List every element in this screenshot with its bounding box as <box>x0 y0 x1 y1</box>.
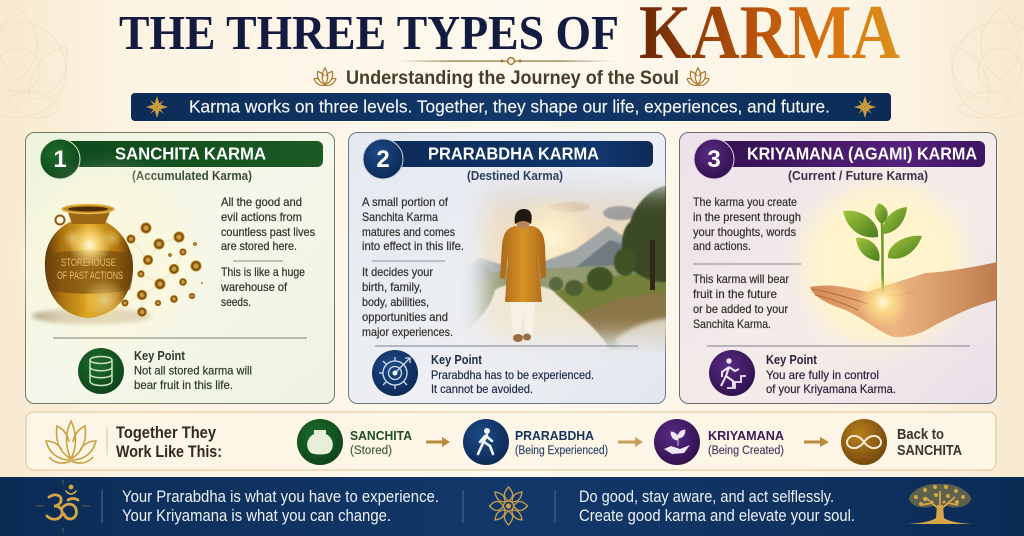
key point: Key Point <box>431 352 483 367</box>
description text: matures and comes <box>362 225 455 239</box>
flow heading: Together They <box>116 424 217 442</box>
icon: mandala <box>490 487 528 525</box>
description text: Sanchita Karma <box>362 210 438 224</box>
description text: into effect in this life. <box>362 239 464 253</box>
key point: It cannot be avoided. <box>431 382 533 396</box>
key point: Prarabdha has to be experienced. <box>431 368 594 382</box>
step: back to Sanchita <box>841 419 962 465</box>
description text <box>362 195 464 339</box>
step: Prarabdha: PRARABDHA <box>515 428 595 443</box>
icon: lotus <box>46 421 96 463</box>
icon: climbing stairs <box>709 350 755 396</box>
subtitle: (Accumulated Karma) <box>132 168 252 183</box>
description text: birth, family, <box>362 280 422 294</box>
description text: countless past lives <box>221 225 315 239</box>
pot label: OF PAST ACTIONS <box>57 270 123 282</box>
panel: Prarabdha Karma <box>348 132 680 404</box>
description text: It decides your <box>362 265 433 279</box>
pot label <box>57 257 123 282</box>
description text: your thoughts, words <box>693 225 796 239</box>
header bar: 1 <box>53 146 67 173</box>
header bar: 2 <box>376 146 390 173</box>
subtitle: Understanding the Journey of the Soul <box>346 68 679 89</box>
description text: warehouse of <box>220 280 288 294</box>
illustration: golden pot with seeds <box>25 175 203 345</box>
description text: fruit in the future <box>693 287 777 301</box>
illustration: man walking toward sunrise <box>468 172 666 354</box>
arrow <box>426 437 450 447</box>
description text: are stored here. <box>221 239 297 253</box>
intro banner <box>131 93 891 121</box>
footer text right <box>579 488 855 525</box>
step: Sanchita: SANCHITA <box>350 428 413 443</box>
header bar <box>694 139 985 179</box>
header bar: 3 <box>707 146 721 173</box>
panel: Kriyamana Karma <box>680 132 997 404</box>
panel: together they work like this <box>26 412 996 470</box>
pot label: STOREHOUSE <box>61 257 116 269</box>
intro banner: Karma works on three levels. Together, they shape our life, experiences, and future. <box>189 96 830 116</box>
description text: and actions. <box>693 239 751 253</box>
step: Kriyamana: KRIYAMANA <box>708 428 785 443</box>
title <box>119 0 900 75</box>
key point: Key Point <box>766 352 818 367</box>
description text: All the good and <box>221 195 302 209</box>
title ornament <box>398 58 614 64</box>
flow heading <box>116 424 222 461</box>
step: Kriyamana <box>654 419 785 465</box>
description text: major experiences. <box>362 325 453 339</box>
icon: tree of life <box>908 484 972 524</box>
description text: A small portion of <box>362 195 449 209</box>
key point: of your Kriyamana Karma. <box>766 382 896 396</box>
illustration: hand holding sapling <box>802 183 997 347</box>
key point: bear fruit in this life. <box>134 378 233 392</box>
man <box>500 209 546 342</box>
title: THE THREE TYPES OF <box>119 5 619 60</box>
subtitle: (Destined Karma) <box>467 168 563 183</box>
flow heading: Work Like This: <box>116 443 222 461</box>
header bar: SANCHITA KARMA <box>115 144 266 164</box>
icon: database stack <box>78 348 124 394</box>
header bar <box>363 139 653 179</box>
arrow <box>804 437 829 447</box>
header bar: PRARABDHA KARMA <box>428 144 599 164</box>
arrow <box>618 437 643 447</box>
step: Prarabdha <box>463 419 608 465</box>
decorative mandala left <box>0 8 67 118</box>
footer text left: Your Prarabdha is what you have to experience. <box>122 488 439 506</box>
key point: You are fully in control <box>766 368 879 382</box>
key point <box>766 352 896 396</box>
seeds <box>121 222 203 317</box>
description text <box>220 195 315 309</box>
key point: Key Point <box>134 348 186 363</box>
step: back to Sanchita: SANCHITA <box>897 442 962 459</box>
icon: target and arrow <box>372 350 418 396</box>
description text: This is like a huge <box>221 265 305 279</box>
description text: opportunities and <box>362 310 448 324</box>
step: back to Sanchita: Back to <box>897 426 944 443</box>
header bar <box>40 139 323 179</box>
description text: evil actions from <box>221 210 302 224</box>
step: Sanchita: (Stored) <box>350 445 392 457</box>
description text: body, abilities, <box>362 295 429 309</box>
footer text right: Do good, stay aware, and act selflessly. <box>579 488 834 506</box>
description text: or be added to your <box>693 302 788 316</box>
footer band <box>0 477 1024 536</box>
description text: This karma will bear <box>693 272 789 286</box>
subtitle: (Current / Future Karma) <box>788 168 928 183</box>
step: Sanchita <box>297 419 413 465</box>
step: Prarabdha: (Being Experienced) <box>515 445 608 457</box>
description text: seeds. <box>221 295 251 309</box>
key point <box>431 352 594 396</box>
description text: in the present through <box>693 210 801 224</box>
footer text left: Your Kriyamana is what you can change. <box>122 507 391 525</box>
icon: om <box>36 480 90 532</box>
key point <box>134 348 252 392</box>
header bar: KRIYAMANA (AGAMI) KARMA <box>747 144 977 164</box>
description text <box>693 195 801 331</box>
footer text left <box>122 488 439 525</box>
footer text right: Create good karma and elevate your soul. <box>579 507 855 525</box>
description text: The karma you create <box>693 195 797 209</box>
panel: Sanchita Karma <box>25 132 334 404</box>
step: Kriyamana: (Being Created) <box>708 445 784 457</box>
decorative mandala right <box>951 8 1024 118</box>
description text: Sanchita Karma. <box>693 317 771 331</box>
key point: Not all stored karma will <box>134 364 252 378</box>
